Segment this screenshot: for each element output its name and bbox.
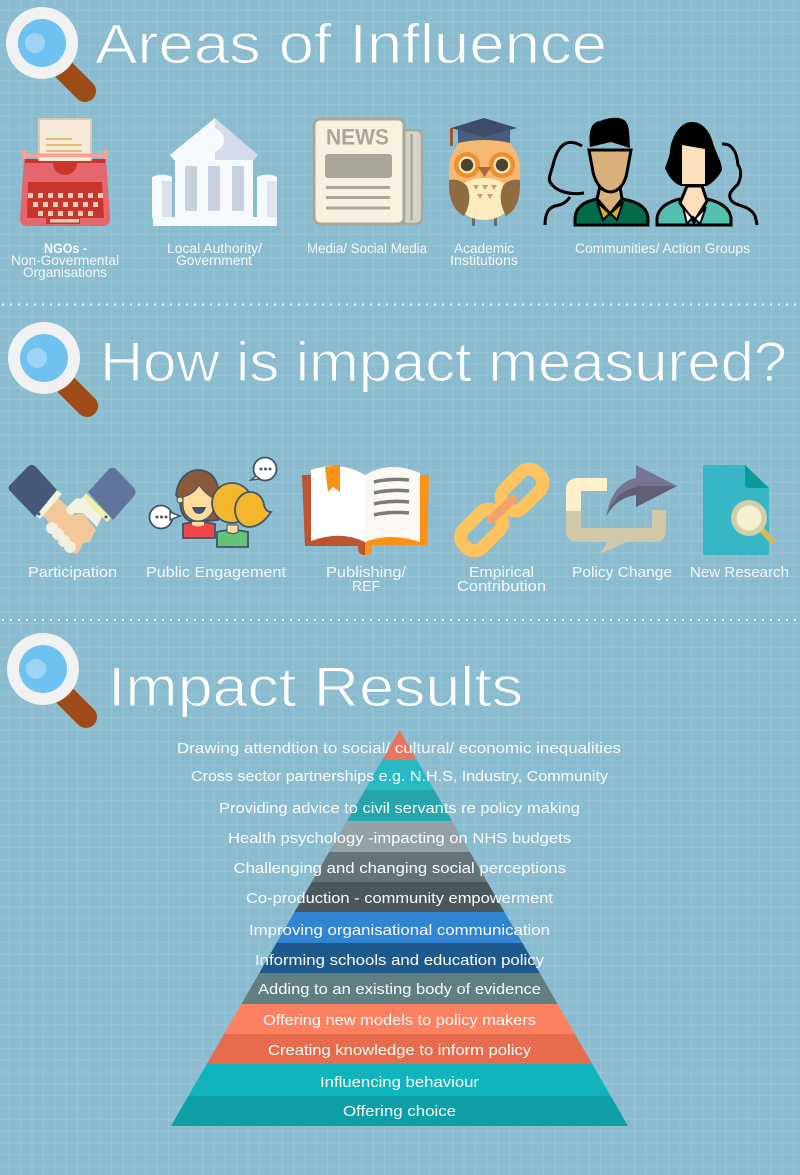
heading: How is impact measured?: How is impact measured?: [100, 330, 787, 393]
pyramid labels: [177, 740, 621, 1120]
pyramid labels: Challenging and changing social perceptions: [234, 860, 566, 877]
pyramid labels: Offering new models to policy makers: [263, 1012, 536, 1029]
icon: newspaper: [314, 119, 422, 224]
pyramid labels: Health psychology -impacting on NHS budgets: [228, 830, 571, 847]
icon: magnifying glass, section 3: [7, 633, 86, 717]
label: NGOs: Non-Govermental: [11, 253, 119, 268]
heading: Areas of Influence: Areas of Influence: [95, 12, 607, 75]
label: NGOs: NGOs -: [44, 241, 87, 256]
icon: chain links: [456, 465, 547, 555]
pyramid labels: Influencing behaviour: [320, 1074, 479, 1091]
pyramid labels: Drawing attendtion to social/ cultural/ economic inequalities: [177, 740, 621, 757]
pyramid labels: Adding to an existing body of evidence: [258, 981, 541, 998]
pyramid labels: Improving organisational communication: [249, 922, 550, 939]
icon: handshake: [8, 465, 136, 554]
label: Local Authority: [167, 241, 262, 268]
pyramid bands: [160, 730, 640, 1126]
icon: research document: [703, 465, 774, 555]
pyramid labels: Cross sector partnerships e.g. N.H.S, Industry, Community: [191, 768, 609, 785]
label: Publishing / REF: [326, 565, 407, 595]
label: Local Authority: Government: [176, 253, 252, 268]
panel: impact measures icons: [8, 458, 789, 595]
label: Empirical Contribution: Empirical: [469, 565, 534, 581]
label: Academic Institutions: Academic: [454, 241, 514, 256]
label: Local Authority: Local Authority/: [167, 241, 262, 256]
label: NGOs: [11, 241, 119, 280]
pyramid labels: Offering choice: [343, 1103, 456, 1120]
label: Academic Institutions: Institutions: [450, 253, 518, 268]
label: Communities / Action Groups: Communities/ Action Groups: [575, 241, 750, 256]
icon: owl with mortarboard: [449, 118, 520, 226]
label: Policy Change: Policy Change: [572, 565, 672, 581]
icon: policy change arrow: [566, 465, 677, 554]
label: NGOs: Organisations: [23, 265, 107, 280]
icon: newspaper: NEWS: [326, 124, 389, 150]
chart: impact results pyramid: [160, 730, 640, 1126]
icon: magnifying glass, section 1: [6, 7, 85, 91]
label: Public Engagement: Public Engagement: [146, 565, 286, 581]
label: Empirical Contribution: [457, 565, 546, 595]
label: Academic Institutions: [450, 241, 518, 268]
pyramid labels: Creating knowledge to inform policy: [268, 1042, 532, 1059]
pyramid labels: Providing advice to civil servants re policy making: [219, 800, 580, 817]
icon: government building: [152, 118, 277, 226]
icon: public engagement people: [150, 458, 276, 547]
label: Media / Social Media: Media/ Social Media: [307, 241, 427, 256]
label: New Research: New Research: [690, 565, 789, 581]
heading: Impact Results: Impact Results: [108, 655, 523, 718]
panel: areas of influence icons: [11, 118, 757, 280]
icon: typewriter: [20, 118, 110, 226]
icon: open book: [302, 465, 429, 555]
icon: community people: [545, 118, 757, 225]
icon: magnifying glass, section 2: [8, 322, 87, 406]
pyramid labels: Informing schools and education policy: [255, 952, 545, 969]
label: Participation: Participation: [28, 565, 117, 581]
label: Empirical Contribution: Contribution: [457, 579, 546, 595]
label: Publishing / REF: Publishing/: [326, 565, 407, 581]
label: Publishing / REF: REF: [352, 579, 380, 595]
pyramid labels: Co-production - community empowerment: [246, 890, 554, 907]
